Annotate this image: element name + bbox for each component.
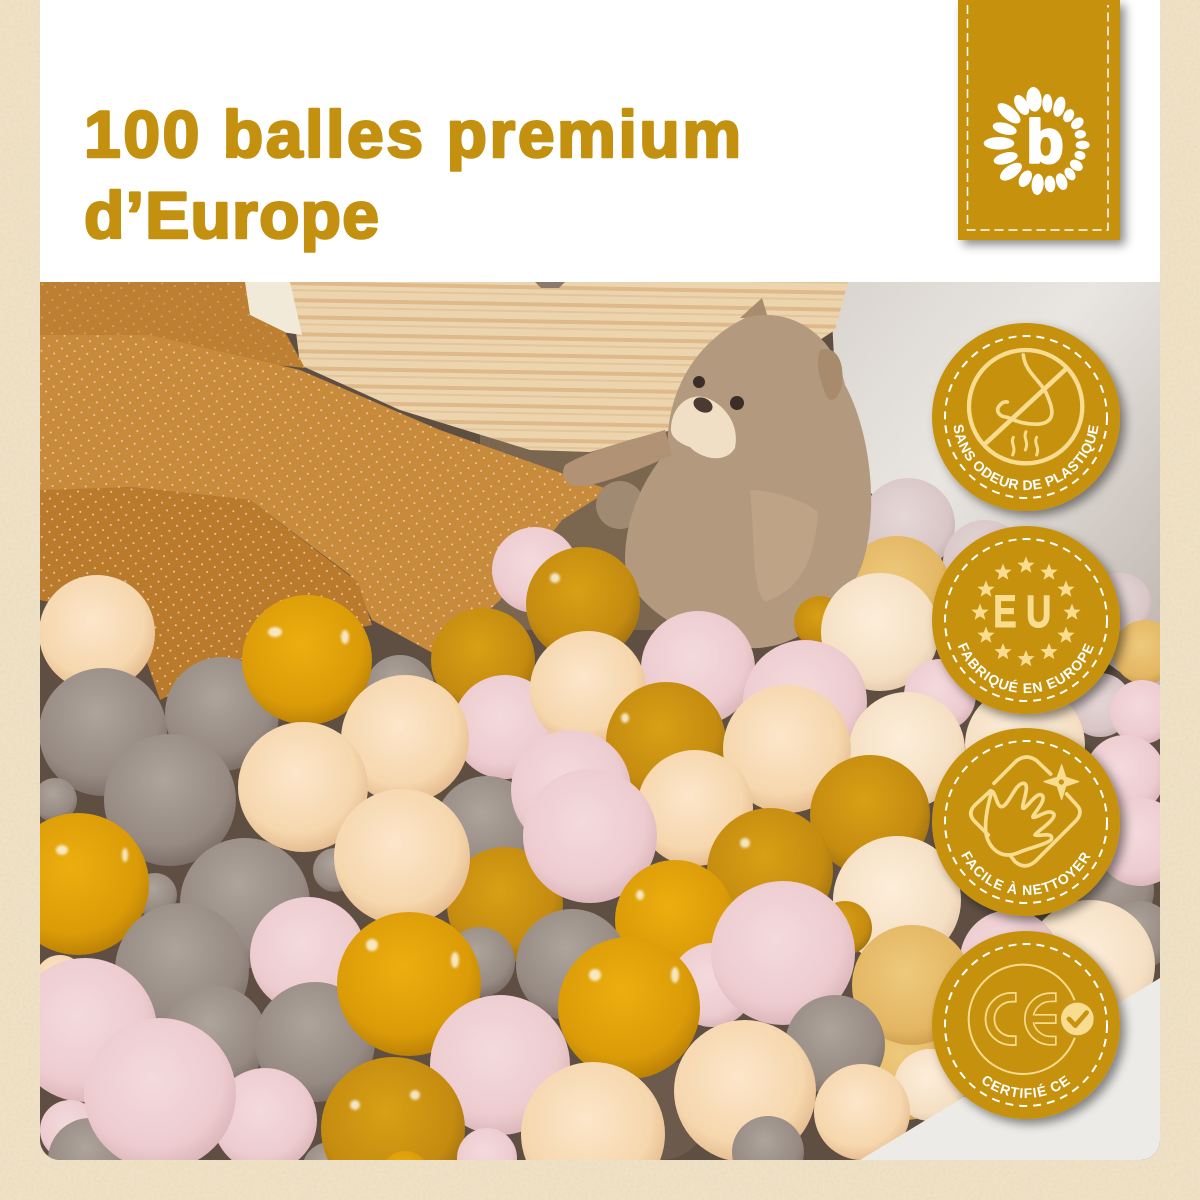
icon: CE mark with check	[969, 965, 1095, 1074]
cushion: striped knit	[243, 282, 848, 452]
title: d’Europe	[84, 178, 379, 252]
box edge bottom right	[860, 978, 1160, 1160]
box wall	[830, 282, 1160, 700]
muslin blankets with dots	[40, 282, 610, 700]
brand label tag with logo	[958, 0, 1120, 240]
icon: hand on cloth with sparkle	[971, 757, 1080, 866]
badge: fabrique en europe	[930, 524, 1132, 726]
badge: facile a nettoyer	[932, 726, 1132, 928]
back balls	[492, 478, 1160, 750]
badge caption: FABRIQUÉ EN EUROPE	[958, 642, 1094, 694]
badge caption: SANS ODEUR DE PLASTIQUE	[954, 424, 1098, 490]
logo: sunflower b: b	[1026, 108, 1064, 176]
icon: EU stars	[971, 556, 1081, 666]
logo: sunflower b	[984, 86, 1090, 195]
title: 100 balles premium	[84, 97, 741, 171]
icon: crossed-out nose	[969, 350, 1082, 463]
title	[84, 97, 741, 252]
badge: sans odeur de plastique	[930, 322, 1132, 522]
badge: certifie CE	[930, 930, 1132, 1130]
badge caption: FACILE À NETTOYER	[961, 850, 1091, 896]
dark gap behind toys	[480, 430, 680, 630]
header panel	[40, 0, 1160, 282]
foreground balls	[40, 547, 1160, 1160]
badge caption: CERTIFIÉ CE	[982, 1075, 1070, 1098]
teddy bear	[563, 298, 871, 648]
photo: ball pit scene	[7, 282, 1184, 1200]
icon: EU stars: EU	[993, 586, 1061, 637]
ball highlights	[56, 573, 750, 1110]
